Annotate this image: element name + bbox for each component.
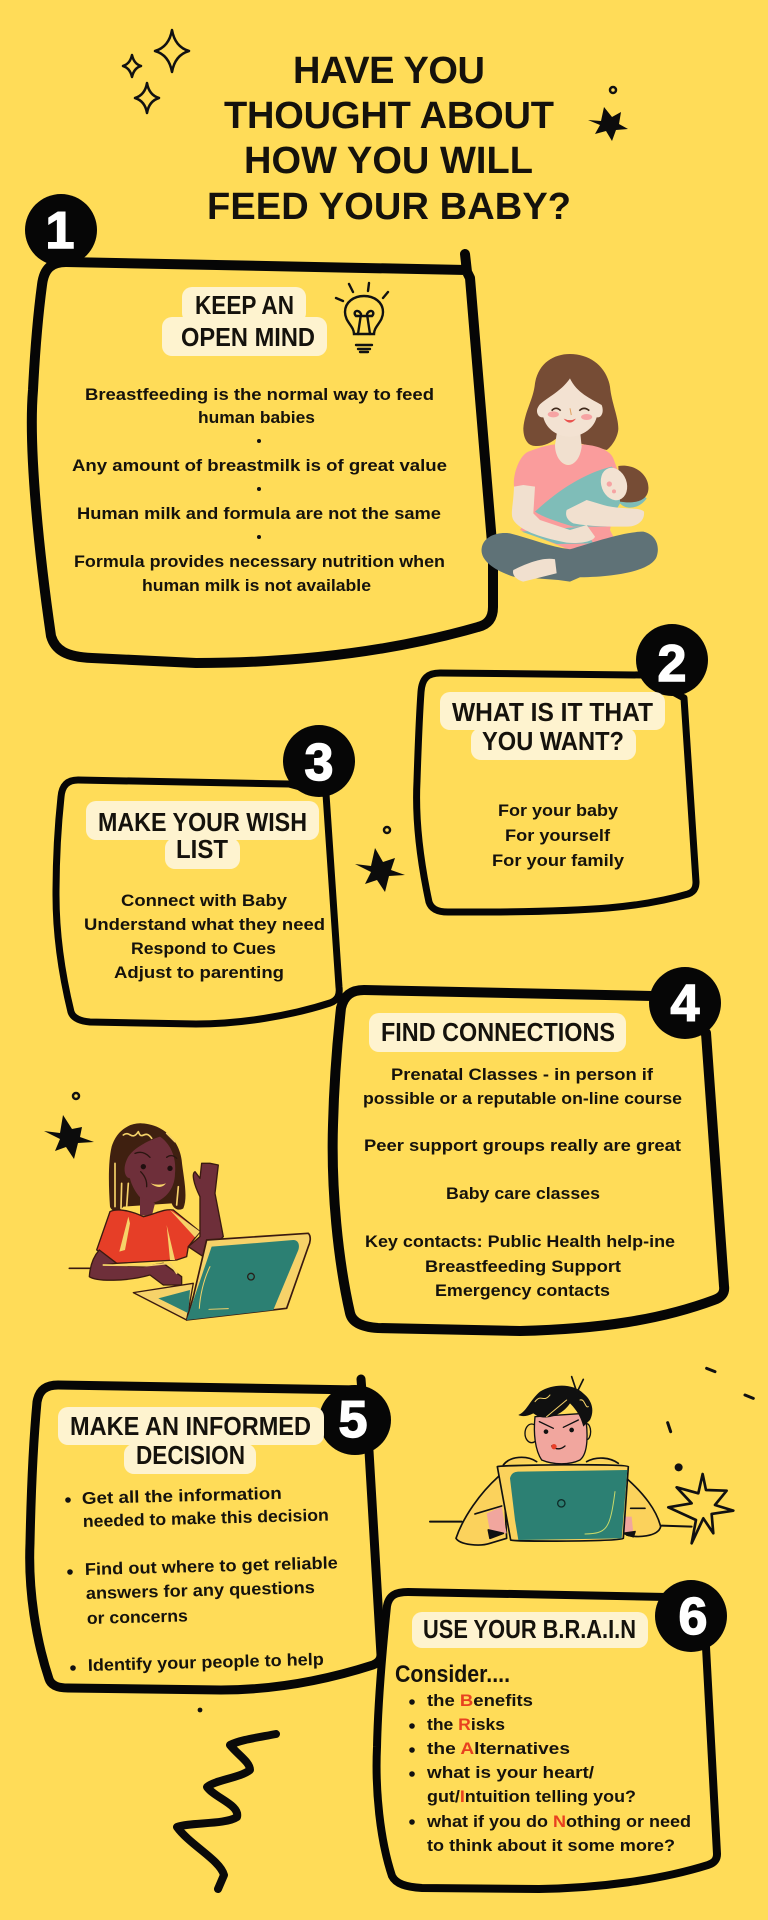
- panel: 1 keep an open mind: [25, 194, 493, 663]
- text block: brain list: [409, 1691, 691, 1855]
- text block: who it is for: For your family: [492, 851, 625, 870]
- heading: make an informed decision: DECISION: [136, 1440, 245, 1470]
- title: HAVE YOU: [293, 50, 485, 92]
- text block: open mind points: human babies: [198, 408, 315, 427]
- icon: star and dot left: [44, 1093, 94, 1159]
- text block: open mind points: Breastfeeding is the normal way to feed: [85, 385, 434, 404]
- panel 3 frame: [56, 780, 339, 1024]
- text block: consider: Consider....: [395, 1661, 510, 1688]
- number badge 6: 6: [679, 1588, 707, 1646]
- text block: decision list: Identify your people to help: [88, 1650, 324, 1675]
- text block: who it is for: For your baby: [498, 801, 619, 820]
- text block: brain list: what is your heart/: [426, 1763, 594, 1782]
- number badge 5: 5: [339, 1391, 367, 1449]
- number badge 1: 1: [46, 202, 74, 260]
- icon: star and dot middle: [355, 827, 405, 892]
- heading: make your wish list: [86, 801, 319, 869]
- text block: open mind points: [72, 385, 447, 595]
- text block: connections: Emergency contacts: [435, 1281, 610, 1300]
- heading: use your brain: USE YOUR B.R.A.I.N: [423, 1614, 636, 1644]
- number badge 3: [283, 725, 355, 797]
- title: HOW YOU WILL: [244, 140, 533, 182]
- icon: star and dot top right: [588, 87, 628, 141]
- number badge 3: 3: [305, 734, 333, 792]
- heading: keep an open mind: [162, 287, 327, 356]
- heading: what is it that you want: WHAT IS IT THAT: [452, 697, 653, 727]
- text block: brain list: what if you do Nothing or need: [426, 1812, 691, 1831]
- illustration: girl waving at laptop: [69, 1123, 310, 1320]
- panel: 2 what is it that you want: [417, 624, 708, 912]
- text block: connections: Prenatal Classes - in person if: [391, 1065, 653, 1084]
- heading: what is it that you want: YOU WANT?: [482, 726, 624, 756]
- title: THOUGHT ABOUT: [224, 95, 554, 137]
- illustration: mother holding baby: [482, 354, 658, 582]
- panel 6 frame: [377, 1592, 717, 1889]
- title: FEED YOUR BABY?: [207, 186, 571, 228]
- panel: 4 find connections: [333, 967, 724, 1331]
- text block: brain list: the Benefits: [427, 1691, 533, 1710]
- heading: keep an open mind: KEEP AN: [195, 290, 294, 320]
- text block: connections: Peer support groups really are great: [364, 1136, 681, 1155]
- panel 2 frame: [417, 673, 696, 912]
- number badge 4: [649, 967, 721, 1039]
- text block: open mind points: human milk is not available: [142, 576, 371, 595]
- text block: who it is for: [492, 801, 625, 870]
- text block: decision list: Get all the information: [82, 1484, 282, 1508]
- text block: wish list: Respond to Cues: [131, 939, 276, 958]
- number badge 5: [319, 1385, 391, 1455]
- number badge 6: [655, 1580, 727, 1652]
- text block: connections: Breastfeeding Support: [425, 1257, 621, 1276]
- text block: connections: Baby care classes: [446, 1184, 600, 1203]
- text block: decision list: answers for any questions: [86, 1578, 315, 1603]
- text block: who it is for: For yourself: [505, 826, 610, 845]
- text block: connections: Key contacts: Public Health help-ine: [365, 1232, 675, 1251]
- text block: decision list: or concerns: [87, 1606, 188, 1628]
- number badge 2: [636, 624, 708, 696]
- heading: make your wish list: MAKE YOUR WISH: [98, 807, 307, 837]
- text block: open mind points: Any amount of breastmilk is of great value: [72, 456, 447, 475]
- text block: brain list: the Risks: [427, 1715, 505, 1734]
- number badge 4: 4: [671, 975, 700, 1033]
- text block: decision list: [65, 1484, 338, 1675]
- icon: sparkles: [123, 30, 189, 113]
- panel: 6 use your brain: [377, 1580, 727, 1889]
- icon: light bulb: [336, 283, 388, 352]
- text block: decision list: needed to make this decision: [83, 1506, 329, 1531]
- icon: squiggle: [177, 1708, 276, 1889]
- text block: connections: possible or a reputable on-line course: [363, 1089, 682, 1108]
- icon: explosion star and marks: [668, 1368, 753, 1543]
- heading: make your wish list: LIST: [176, 834, 228, 864]
- panel 4 frame: [333, 990, 724, 1331]
- text block: brain list: the Alternatives: [427, 1739, 570, 1758]
- text block: decision list: Find out where to get reliable: [85, 1553, 338, 1579]
- heading: make an informed decision: MAKE AN INFORMED: [70, 1411, 311, 1441]
- number badge 1: [25, 194, 97, 266]
- panel: 3 make your wish list: [56, 725, 355, 1024]
- panel 1 frame: [32, 254, 493, 663]
- text block: wish list: Connect with Baby: [121, 891, 288, 910]
- text block: brain list: gut/Intuition telling you?: [427, 1787, 636, 1806]
- heading: what is it that you want: [440, 692, 665, 760]
- text block: connections: [363, 1065, 682, 1300]
- text block: wish list: [84, 891, 325, 982]
- text block: wish list: Adjust to parenting: [114, 963, 284, 982]
- heading: keep an open mind: OPEN MIND: [181, 322, 315, 352]
- text block: open mind points: Human milk and formula are not the same: [77, 504, 441, 523]
- text block: open mind points: Formula provides necessary nutrition when: [74, 552, 445, 571]
- text block: brain list: to think about it some more?: [427, 1836, 675, 1855]
- heading: make an informed decision: [58, 1407, 324, 1474]
- title: [207, 50, 571, 228]
- panel: 5 make an informed decision: [30, 1379, 391, 1690]
- panel 5 frame: [30, 1379, 381, 1690]
- illustration: boy at laptop: [430, 1377, 692, 1545]
- heading: find connections: FIND CONNECTIONS: [381, 1017, 615, 1047]
- number badge 2: 2: [658, 635, 686, 693]
- text block: wish list: Understand what they need: [84, 915, 325, 934]
